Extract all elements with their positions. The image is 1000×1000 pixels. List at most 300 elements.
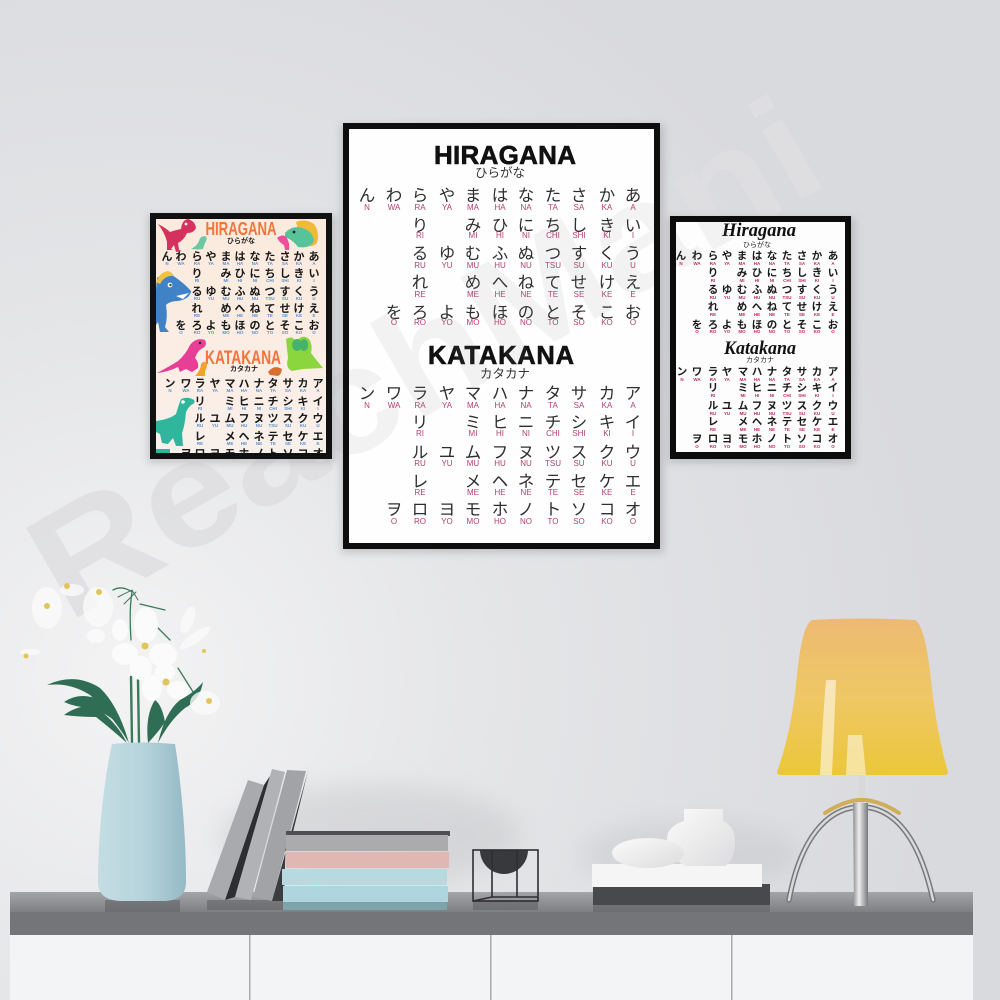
katakana grid: リミヒニチシキイ: [194, 395, 324, 408]
katakana grid: YO: [441, 517, 453, 526]
subheading: katakana: カタカナ: [746, 355, 774, 364]
hiragana grid: A: [312, 261, 316, 266]
hiragana grid: E: [630, 290, 636, 299]
hiragana grid: MI: [224, 278, 228, 283]
katakana grid: NO: [769, 444, 776, 449]
hiragana grid: WA: [693, 261, 701, 266]
hiragana grid: NO: [252, 330, 259, 335]
hiragana grid: RE: [194, 313, 200, 318]
icon: green triceratops: [286, 337, 323, 371]
katakana grid: ンワラヤマハナタサカア: [164, 377, 324, 390]
katakana grid: RA: [197, 388, 204, 393]
hiragana grid: KI: [297, 278, 301, 283]
hiragana grid: れめへねてせけえ: [708, 301, 838, 313]
poster: brush script kana chart: [670, 216, 851, 459]
hiragana grid: NO: [520, 318, 532, 327]
hiragana grid: りみひにちしきい: [192, 267, 320, 280]
hiragana grid: SO: [573, 318, 585, 327]
katakana grid: YU: [724, 411, 730, 416]
heading: hiragana: HIRAGANA: [434, 140, 576, 170]
hiragana grid: SO: [799, 329, 806, 334]
hiragana grid: NU: [769, 295, 775, 300]
katakana grid: KE: [602, 488, 612, 497]
katakana grid: RE: [197, 441, 203, 446]
katakana grid: NI: [257, 406, 261, 411]
hiragana grid: MU: [222, 296, 230, 301]
hiragana grid: ME: [223, 313, 229, 318]
hiragana grid: YO: [208, 330, 215, 335]
bowl: [480, 850, 528, 874]
hiragana grid: RE: [414, 290, 426, 299]
hiragana grid: KI: [815, 278, 819, 283]
katakana grid: HI: [755, 393, 759, 398]
icon: blue vase: [98, 742, 186, 901]
hiragana grid: MU: [738, 295, 746, 300]
katakana grid: RI: [711, 393, 715, 398]
hiragana grid: WA: [177, 261, 185, 266]
wire frame bowl: [473, 850, 538, 901]
hiragana grid: KA: [814, 261, 821, 266]
hiragana grid: HA: [237, 261, 244, 266]
katakana grid: SU: [573, 459, 585, 468]
hiragana grid: HI: [755, 278, 759, 283]
hiragana grid: MA: [222, 261, 230, 266]
hiragana grid: NI: [522, 231, 530, 240]
hiragana grid: RU: [194, 296, 200, 301]
hiragana grid: KU: [814, 295, 820, 300]
hiragana grid: SU: [799, 295, 805, 300]
hiragana grid: んわらやまはなたさかあ: [162, 250, 320, 263]
dark side of third book: [272, 771, 308, 901]
katakana grid: NE: [769, 427, 775, 432]
hiragana grid: SA: [282, 261, 289, 266]
hiragana grid: SE: [282, 313, 288, 318]
hiragana grid: HI: [496, 231, 504, 240]
katakana grid: YU: [212, 423, 218, 428]
hiragana grid: SO: [282, 330, 289, 335]
katakana grid: レメヘネテセケエ: [708, 416, 838, 428]
katakana grid: HE: [754, 427, 760, 432]
hiragana grid: れめへねてせけえ: [192, 302, 320, 315]
hiragana grid: RO: [414, 318, 426, 327]
hiragana grid: NA: [520, 203, 532, 212]
hiragana grid: HA: [494, 203, 506, 212]
katakana grid: YA: [442, 401, 453, 410]
katakana grid: ンワラヤマハナタサカア: [677, 366, 839, 378]
hiragana grid: KO: [601, 318, 613, 327]
hiragana grid: TA: [548, 203, 558, 212]
katakana grid: HI: [242, 406, 246, 411]
katakana grid: O: [391, 517, 397, 526]
subheading: katakana: カタカナ: [480, 367, 530, 381]
hiragana grid: MI: [469, 231, 477, 240]
katakana grid: CHI: [546, 429, 560, 438]
cabinet doors: [10, 935, 973, 1000]
katakana grid: O: [831, 444, 835, 449]
heading: hiragana: HIRAGANA: [206, 219, 276, 239]
hiragana grid: KA: [602, 203, 613, 212]
hiragana grid: N: [679, 261, 683, 266]
orchid in vase: [20, 583, 220, 901]
hiragana grid: RU: [414, 261, 426, 270]
hiragana grid: CHI: [546, 231, 560, 240]
katakana grid: SA: [285, 388, 292, 393]
hiragana grid: I: [832, 278, 834, 283]
leaning books: [207, 769, 308, 901]
katakana grid: SU: [799, 411, 805, 416]
icon: small pink dinosaur: [277, 236, 289, 250]
blue book: [282, 869, 447, 885]
katakana grid: HO: [754, 444, 761, 449]
katakana grid: MO: [739, 444, 747, 449]
paper: [676, 222, 845, 452]
hiragana grid: [676, 250, 839, 334]
hiragana grid: MA: [467, 203, 480, 212]
icon: red dinosaur: [158, 219, 196, 252]
katakana grid: O: [695, 444, 699, 449]
hiragana grid: をろよもほのとそこお: [386, 303, 641, 322]
shelf front edge: [10, 912, 973, 935]
hiragana grid: O: [695, 329, 699, 334]
katakana grid: SE: [285, 441, 291, 446]
katakana grid: ME: [227, 441, 233, 446]
katakana grid: [677, 366, 839, 449]
hiragana grid: MO: [467, 318, 479, 327]
katakana grid: WA: [182, 388, 190, 393]
hiragana grid: NA: [769, 261, 776, 266]
hiragana grid: U: [630, 261, 636, 270]
katakana grid: [359, 384, 641, 526]
hiragana grid: WA: [388, 203, 401, 212]
katakana grid: ンワラヤマハナタサカア: [359, 384, 641, 403]
katakana grid: TO: [784, 444, 791, 449]
katakana grid: A: [831, 377, 835, 382]
katakana grid: HU: [241, 423, 247, 428]
hiragana grid: O: [831, 329, 835, 334]
katakana grid: レメヘネテセケエ: [194, 430, 324, 443]
katakana grid: I: [317, 406, 319, 411]
table lamp: [777, 618, 948, 906]
white round dish: [612, 838, 684, 868]
hiragana grid: るゆむふぬつすくう: [708, 284, 838, 296]
lamp legs: [789, 800, 933, 900]
hiragana grid: KA: [296, 261, 303, 266]
hiragana grid: NI: [253, 278, 257, 283]
katakana grid: MA: [740, 377, 747, 382]
katakana grid: KU: [300, 423, 306, 428]
katakana grid: HA: [754, 377, 761, 382]
katakana grid: CHI: [783, 393, 791, 398]
icon: small orange dinosaur: [195, 362, 207, 376]
katakana grid: SE: [799, 427, 805, 432]
hiragana grid: [162, 250, 320, 335]
subheading: hiragana: ひらがな: [227, 236, 255, 245]
icon: orchid flowers: [20, 584, 220, 715]
hiragana grid: KE: [602, 290, 612, 299]
hiragana grid: KO: [814, 329, 821, 334]
katakana grid: RA: [414, 401, 426, 410]
katakana grid: SHI: [572, 429, 586, 438]
hiragana grid: SHI: [798, 278, 806, 283]
katakana grid: E: [316, 441, 320, 446]
katakana grid: RU: [197, 423, 203, 428]
katakana grid: MI: [740, 393, 746, 398]
reflection: [283, 902, 447, 910]
katakana grid: RO: [414, 517, 426, 526]
hiragana grid: KE: [814, 312, 820, 317]
hiragana grid: TE: [267, 313, 273, 318]
katakana grid: TSU: [782, 411, 792, 416]
katakana grid: TSU: [268, 423, 278, 428]
white ceramics on books: [592, 809, 770, 905]
hiragana grid: YA: [208, 261, 215, 266]
icon: blue dinosaur: [156, 271, 191, 332]
hiragana grid: HI: [238, 278, 242, 283]
katakana grid: MA: [226, 388, 234, 393]
katakana grid: NO: [520, 517, 532, 526]
shade highlight: [820, 680, 836, 775]
katakana grid: NU: [256, 423, 262, 428]
hiragana grid: O: [630, 318, 636, 327]
hiragana grid: RA: [414, 203, 426, 212]
heading: katakana: KATAKANA: [428, 342, 574, 370]
katakana grid: MU: [740, 411, 746, 416]
katakana grid: RI: [416, 429, 424, 438]
icon: orchid stems: [113, 588, 195, 743]
hiragana grid: U: [831, 295, 835, 300]
katakana grid: TA: [548, 401, 558, 410]
white book: [592, 864, 762, 887]
icon: small brown dinosaur: [268, 367, 282, 376]
katakana grid: YA: [212, 388, 219, 393]
katakana grid: NI: [522, 429, 530, 438]
hiragana grid: れめへねてせけえ: [412, 274, 641, 292]
hiragana grid: HU: [237, 296, 243, 301]
shelf top surface: [10, 892, 973, 912]
katakana grid: HE: [494, 488, 506, 497]
hiragana grid: HO: [494, 318, 506, 327]
katakana grid: SA: [574, 401, 585, 410]
katakana grid: E: [831, 427, 835, 432]
katakana grid: CHI: [269, 406, 277, 411]
pale blue book: [283, 886, 448, 902]
hiragana grid: RO: [710, 329, 717, 334]
hiragana grid: MO: [222, 330, 230, 335]
katakana grid: YU: [441, 459, 453, 468]
icon: orchid leaves: [47, 679, 203, 743]
hiragana grid: RA: [194, 261, 201, 266]
frame: [150, 213, 332, 459]
katakana grid: RE: [414, 488, 426, 497]
hiragana grid: YU: [441, 261, 453, 270]
katakana grid: O: [630, 517, 636, 526]
hiragana grid: をろよもほのとそこお: [176, 319, 320, 332]
katakana grid: A: [316, 388, 320, 393]
hiragana grid: TE: [548, 290, 558, 299]
hiragana grid: KU: [296, 296, 302, 301]
dark gap between books: [225, 776, 270, 900]
katakana grid: N: [168, 388, 172, 393]
hiragana grid: YU: [208, 296, 214, 301]
katakana grid: KE: [300, 441, 306, 446]
hiragana grid: ME: [467, 290, 479, 299]
icon: teal dinosaur: [156, 398, 195, 453]
hiragana grid: NE: [769, 312, 775, 317]
hiragana grid: るゆむふぬつすくう: [412, 245, 641, 263]
icon: flower centres: [24, 583, 212, 704]
hiragana grid: NO: [769, 329, 776, 334]
hiragana grid: HE: [237, 313, 243, 318]
katakana grid: TA: [270, 388, 277, 393]
katakana grid: U: [316, 423, 320, 428]
hiragana grid: SHI: [281, 278, 289, 283]
hiragana grid: をろよもほのとそこお: [692, 319, 839, 331]
hiragana grid: NE: [520, 290, 532, 299]
katakana grid: RU: [414, 459, 426, 468]
katakana grid: KI: [301, 406, 305, 411]
hiragana grid: KI: [603, 231, 611, 240]
hiragana grid: TA: [267, 261, 274, 266]
katakana grid: SE: [574, 488, 584, 497]
katakana grid: A: [630, 401, 636, 410]
hiragana grid: CHI: [783, 278, 791, 283]
katakana grid: N: [680, 377, 684, 382]
katakana grid: NU: [769, 411, 775, 416]
hiragana grid: NE: [252, 313, 258, 318]
katakana grid: WA: [693, 377, 701, 382]
hiragana grid: RA: [710, 261, 717, 266]
katakana grid: YO: [724, 444, 731, 449]
frame: [343, 123, 660, 549]
katakana grid: TSU: [545, 459, 561, 468]
frame: [473, 850, 538, 901]
katakana grid: NI: [770, 393, 774, 398]
hiragana grid: HO: [754, 329, 761, 334]
katakana grid: KA: [300, 388, 307, 393]
katakana grid: KA: [602, 401, 613, 410]
hiragana grid: RI: [416, 231, 424, 240]
hiragana grid: YA: [724, 261, 731, 266]
hiragana grid: んわらやまはなたさかあ: [676, 250, 838, 262]
hiragana grid: RU: [710, 295, 716, 300]
katakana grid: SU: [285, 423, 291, 428]
katakana grid: MI: [469, 429, 477, 438]
katakana grid: KU: [814, 411, 820, 416]
katakana grid: E: [630, 488, 636, 497]
hiragana grid: SU: [573, 261, 585, 270]
katakana grid: SHI: [798, 393, 806, 398]
katakana grid: N: [364, 401, 370, 410]
katakana grid: RA: [710, 377, 717, 382]
hiragana grid: N: [165, 261, 169, 266]
dark cover: [286, 831, 450, 836]
katakana grid: RO: [710, 444, 717, 449]
katakana grid: KO: [814, 444, 821, 449]
katakana grid: リミヒニチシキイ: [412, 414, 641, 432]
katakana grid: KO: [601, 517, 613, 526]
hiragana grid: E: [312, 313, 316, 318]
katakana grid: NE: [520, 488, 532, 497]
hiragana grid: YA: [442, 203, 453, 212]
katakana grid: WA: [388, 401, 401, 410]
katakana grid: RI: [198, 406, 202, 411]
hiragana grid: MI: [740, 278, 744, 283]
katakana grid: I: [632, 429, 634, 438]
subheading: hiragana: ひらがな: [743, 240, 771, 249]
icon: pink long-neck dinosaur: [157, 339, 206, 373]
hiragana grid: NI: [770, 278, 774, 283]
katakana grid: U: [630, 459, 636, 468]
hiragana grid: CHI: [266, 278, 274, 283]
katakana grid: SO: [573, 517, 585, 526]
katakana grid: ルユムフヌツスクウ: [708, 400, 838, 412]
watermark overlay on posters: ReachMani: [0, 64, 848, 651]
katakana grid: NA: [256, 388, 263, 393]
katakana grid: ルユムフヌツスクウ: [412, 443, 641, 462]
katakana grid: NA: [769, 377, 776, 382]
katakana grid: KA: [814, 377, 821, 382]
shelf reflections: [105, 900, 770, 912]
lamp shade: [777, 618, 948, 775]
hiragana grid: りみひにちしきい: [708, 267, 838, 279]
paper: [156, 219, 326, 453]
katakana grid: TE: [548, 488, 558, 497]
katakana grid: HU: [494, 459, 506, 468]
katakana grid: SA: [799, 377, 806, 382]
icon: teal stegosaurus: [285, 220, 318, 247]
hiragana grid: NU: [252, 296, 258, 301]
heading: hiragana: Hiragana: [721, 220, 796, 241]
katakana grid: レメヘネテセケエ: [412, 472, 641, 491]
katakana grid: ヲロヨモホノトソコオ: [180, 447, 324, 460]
hiragana grid: HU: [754, 295, 760, 300]
hiragana grid: ME: [739, 312, 745, 317]
subheading: hiragana: ひらがな: [475, 165, 525, 180]
katakana grid: TE: [784, 427, 790, 432]
hiragana grid: るゆむふぬつすくう: [192, 285, 320, 298]
hiragana grid: HO: [237, 330, 244, 335]
katakana grid: MI: [228, 406, 232, 411]
hiragana grid: I: [632, 231, 634, 240]
hiragana grid: HE: [754, 312, 760, 317]
white jar: [667, 809, 735, 866]
hiragana grid: SHI: [572, 231, 586, 240]
heading: katakana: KATAKANA: [205, 348, 281, 369]
hiragana grid: RI: [195, 278, 199, 283]
frame: [670, 216, 851, 459]
katakana grid: [164, 377, 324, 460]
katakana grid: MO: [467, 517, 479, 526]
grey book: [286, 835, 448, 851]
katakana grid: MU: [226, 423, 234, 428]
katakana grid: ME: [740, 427, 746, 432]
heading: katakana: Katakana: [723, 338, 796, 359]
centre leg: [853, 803, 868, 906]
hiragana grid: TE: [784, 312, 790, 317]
hiragana grid: NA: [252, 261, 259, 266]
hiragana grid: A: [831, 261, 835, 266]
katakana grid: SHI: [284, 406, 292, 411]
hiragana grid: りみひにちしきい: [412, 216, 641, 235]
hiragana grid: I: [313, 278, 315, 283]
katakana grid: TA: [784, 377, 791, 382]
katakana grid: HA: [494, 401, 506, 410]
hiragana grid: HU: [494, 261, 506, 270]
hiragana grid: SA: [574, 203, 585, 212]
katakana grid: HA: [241, 388, 248, 393]
hiragana grid: RI: [711, 278, 715, 283]
door dividers: [249, 935, 732, 1000]
